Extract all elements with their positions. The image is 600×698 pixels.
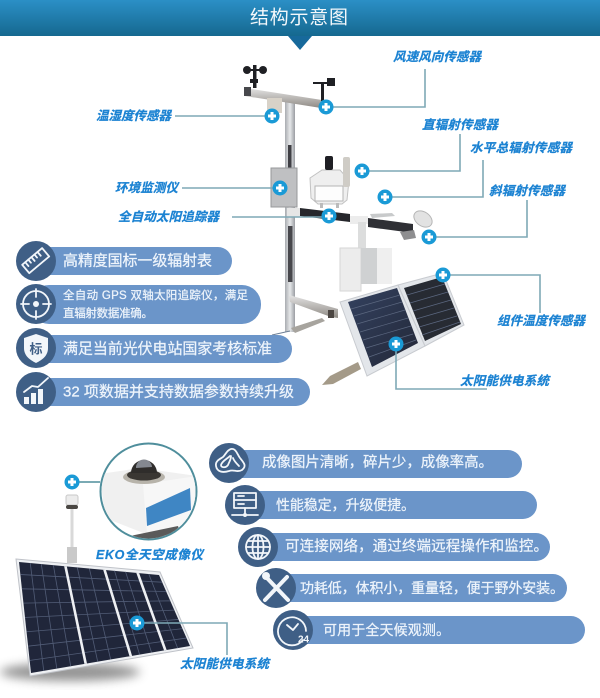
icon: crossed tools (262, 572, 288, 600)
feature: data parameters: 32 项数据并支持数据参数持续升级 (63, 384, 294, 400)
label: module temperature sensor: 组件温度传感器 (497, 314, 586, 328)
icon: globe (246, 535, 270, 559)
label: horizontal total radiation sensor: 水平总辐射传感器 (470, 141, 573, 155)
environment monitor box (271, 168, 297, 207)
feature: national standard (16, 328, 292, 368)
feature: stability: 性能稳定，升级便捷。 (276, 497, 415, 513)
weather station structure (243, 65, 464, 385)
cross arm (245, 88, 322, 108)
label: direct radiation sensor: 直辐射传感器 (422, 118, 499, 132)
equipment boxes (340, 248, 392, 291)
feature: imaging quality: 成像图片清晰，碎片少，成像率高。 (262, 454, 493, 471)
feature: low power (256, 568, 567, 608)
feature: tracker: 直辐射数据准确。 (63, 306, 153, 320)
feature: radiometer (16, 241, 232, 281)
feature: network: 可连接网络，通过终端远程操作和监控。 (285, 538, 548, 555)
icon: shield: 标 (29, 342, 43, 356)
feature: stability (225, 485, 537, 525)
feature: low power: 功耗低，体积小，重量轻，便于野外安装。 (300, 580, 564, 596)
feature: all weather: 可用于全天候观测。 (323, 622, 450, 638)
bottom solar panel array (0, 508, 193, 681)
feature: network (238, 527, 550, 567)
main pole (285, 100, 295, 332)
label: temperature humidity sensor: 温湿度传感器 (96, 109, 172, 123)
inset: EKO sky imager (79, 444, 197, 545)
feature list: right (209, 443, 585, 650)
label: EKO sky imager: EKO全天空成像仪 (96, 548, 205, 562)
plus markers: structure diagram (264, 100, 450, 352)
support struts (272, 295, 361, 385)
feature: national standard: 满足当前光伏电站国家考核标准 (63, 340, 272, 358)
feature: data parameters (16, 372, 310, 412)
label: bottom solar power system: 太阳能供电系统 (180, 657, 271, 671)
label: slanted radiation sensor: 斜辐射传感器 (489, 184, 566, 198)
icon: 24 hour clock (278, 617, 310, 646)
header banner (0, 0, 600, 50)
icon: ruler (22, 248, 49, 273)
solar tracker (310, 156, 350, 208)
title: 结构示意图 (250, 6, 348, 28)
icon: crosshair (21, 289, 51, 319)
icon: growth chart (24, 378, 48, 404)
icon: cloud loop (216, 449, 245, 472)
feature: radiometer: 高精度国标一级辐射表 (63, 252, 212, 270)
label: wind sensor: 风速风向传感器 (393, 50, 482, 64)
icon: monitor (232, 493, 258, 517)
slanted radiation sensor (411, 208, 435, 230)
icon: anemometer (243, 65, 267, 88)
label: solar power system: 太阳能供电系统 (460, 374, 551, 388)
label: environment monitor: 环境监测仪 (115, 181, 180, 195)
small camera on pole (66, 495, 78, 509)
feature list: left (16, 241, 310, 412)
feature: imaging quality (209, 443, 522, 483)
plus marker: sky imager (64, 474, 80, 490)
horizontal tracker arm (287, 208, 416, 250)
icon: 24 hour clock: 24 (298, 634, 310, 646)
feature: all weather (273, 610, 585, 650)
feature: tracker (16, 284, 261, 324)
icon: shield (24, 334, 48, 363)
callout leader lines: structure diagram (175, 69, 540, 389)
feature: tracker: 全自动 GPS 双轴太阳追踪仪，满足 (63, 288, 248, 302)
top solar panels (340, 273, 464, 376)
callout labels: structure diagram (96, 50, 586, 388)
camera pole (70, 508, 74, 558)
callout: bottom solar power system (130, 616, 271, 671)
icon: wind vane (313, 78, 335, 101)
label: solar tracker: 全自动太阳追踪器 (118, 210, 220, 224)
